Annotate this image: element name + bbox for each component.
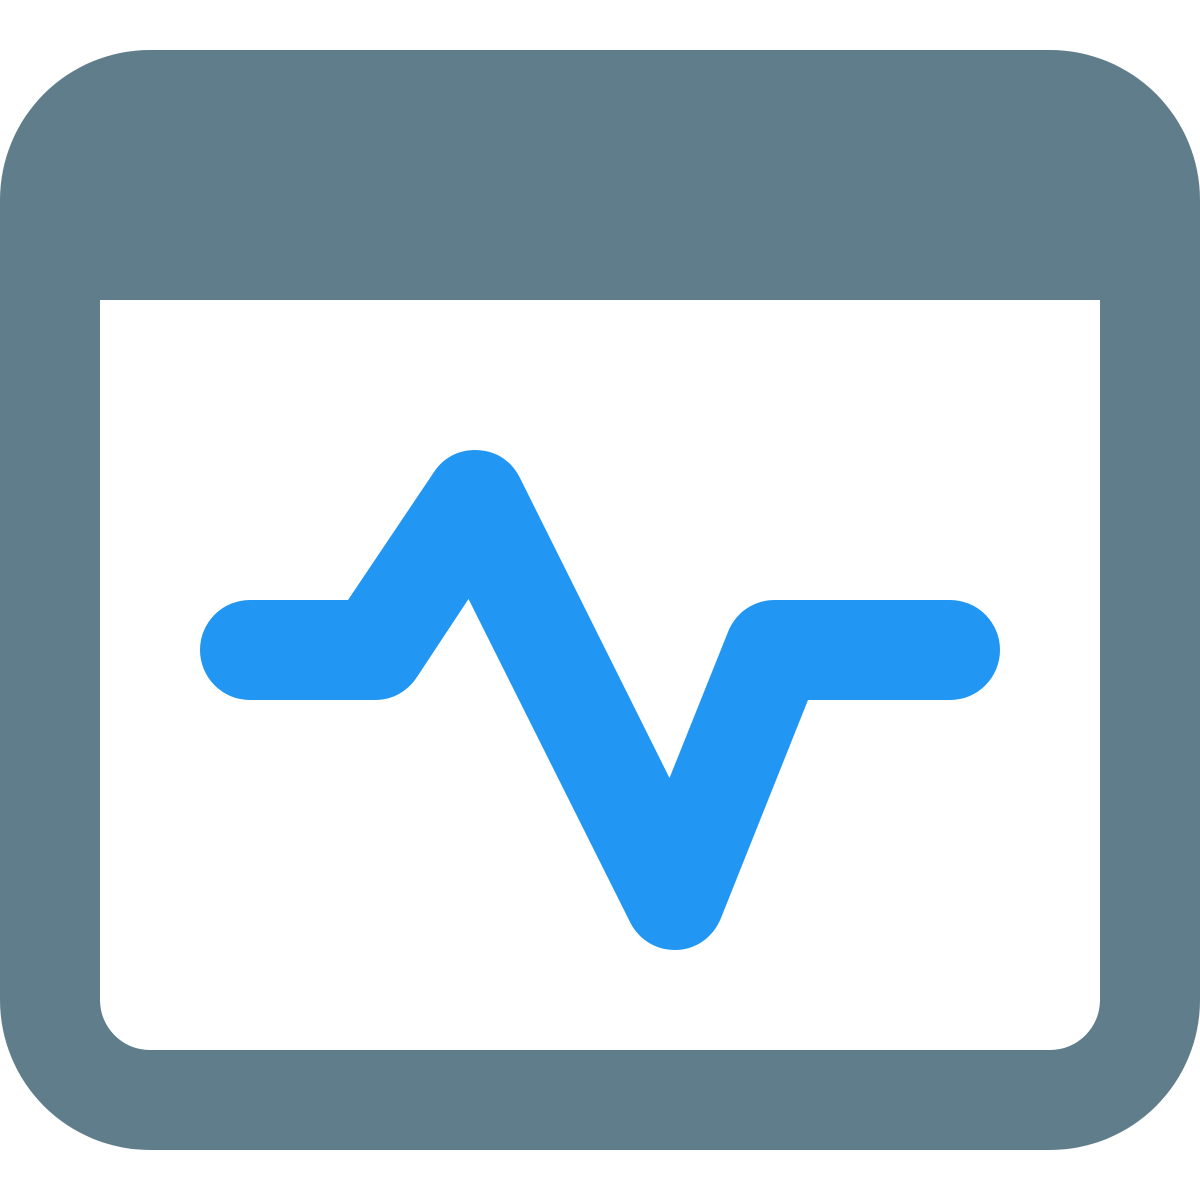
activity pulse line — [200, 450, 1000, 950]
